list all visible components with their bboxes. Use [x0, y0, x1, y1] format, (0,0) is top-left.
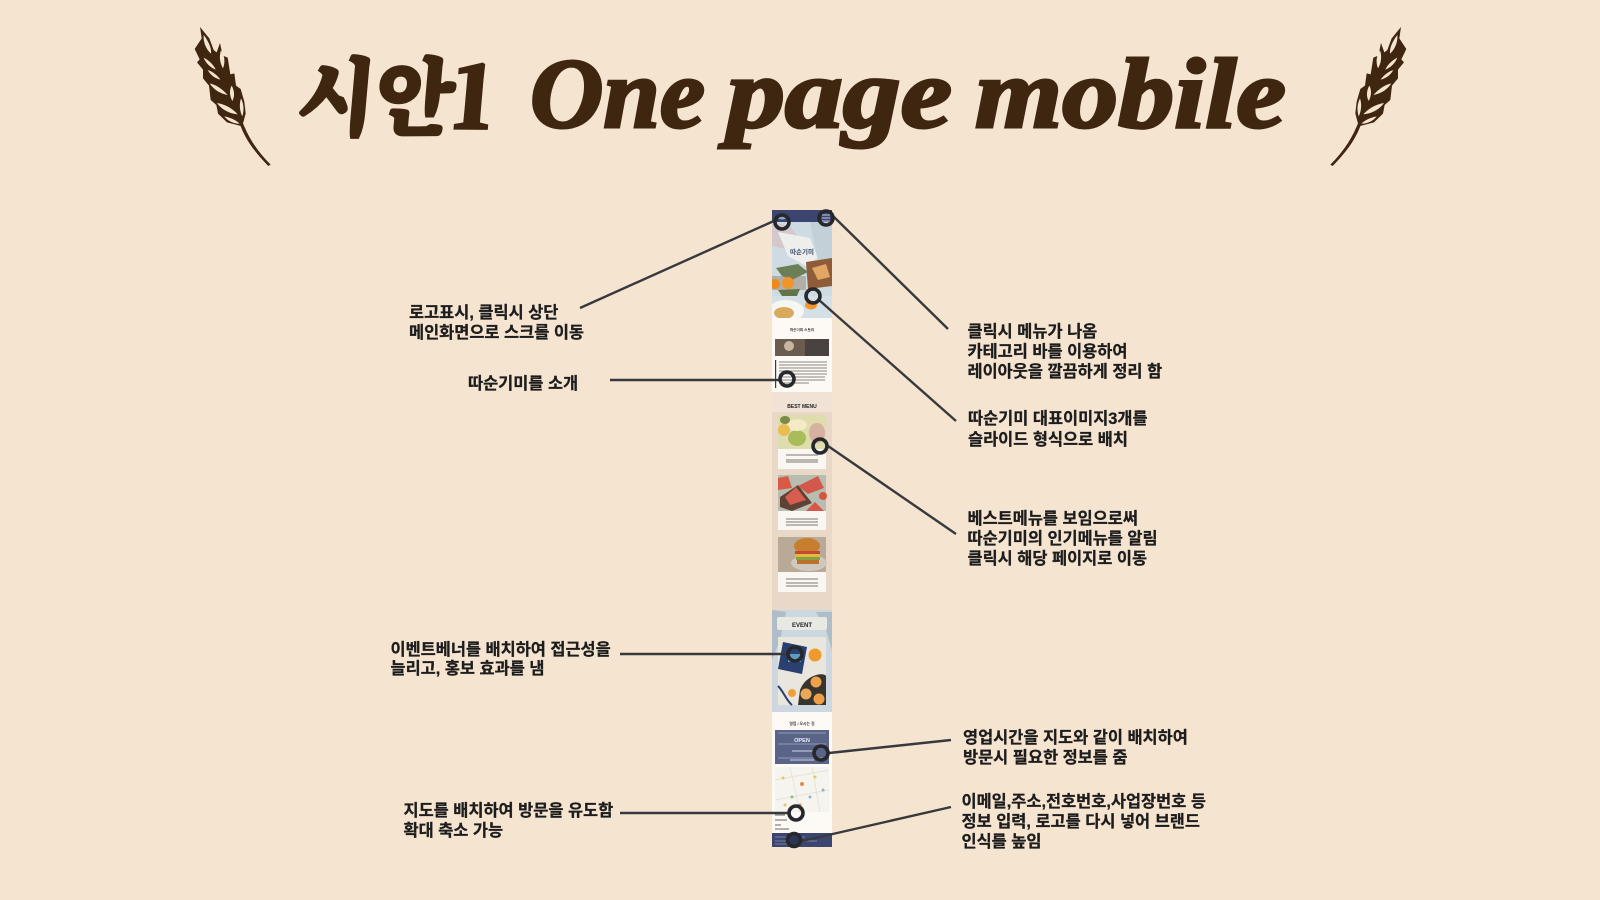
menu card 1 — [778, 415, 826, 469]
label: logo: 메인화면으로 스크롤 이동 — [409, 324, 584, 342]
infographic canvas — [194, 27, 1406, 849]
menu card 3 — [778, 537, 827, 592]
mockup: header bar — [772, 210, 832, 222]
mockup: footer — [772, 833, 832, 847]
callout lines — [580, 216, 956, 841]
highlight circles — [775, 211, 833, 846]
icon: wheat right — [1330, 27, 1406, 166]
label: menu: 클릭시 메뉴가 나옴 — [968, 323, 1097, 341]
mockup: hours and map section: 영업 / 오시는 길 — [789, 721, 815, 726]
label: logo: 로고표시, 클릭시 상단 — [409, 304, 558, 322]
label: event: 늘리고, 홍보 효과를 냄 — [390, 660, 544, 678]
mockup: event banner: EVENT — [792, 623, 812, 629]
title — [293, 32, 1286, 153]
mobile page mockup — [768, 210, 832, 847]
label: best menu: 따순기미의 인기메뉴를 알림 — [968, 529, 1158, 548]
menu card 2 — [778, 475, 827, 530]
mockup: best menu section — [772, 392, 832, 610]
label: slides: 따순기미 대표이미지3개를 — [968, 410, 1148, 428]
label: best menu: 베스트메뉴를 보임으로써 — [968, 510, 1138, 528]
opening hours box: OPEN — [794, 738, 810, 744]
label: slides: 슬라이드 형식으로 배치 — [968, 431, 1128, 449]
title: word page: page — [718, 38, 952, 149]
label: hours: 방문시 필요한 정보를 줌 — [963, 749, 1127, 767]
label: footer: 정보 입력, 로고를 다시 넣어 브랜드 — [962, 813, 1200, 831]
label: menu: 레이아웃을 깔끔하게 정리 함 — [968, 363, 1162, 381]
icon: wheat left — [195, 27, 271, 166]
map — [775, 767, 829, 812]
label: hours: 영업시간을 지도와 같이 배치하여 — [963, 728, 1188, 747]
label: best menu: 클릭시 해당 페이지로 이동 — [968, 550, 1147, 568]
mockup: intro section: 따순기미 스토리 — [790, 327, 814, 332]
title: word mobile: mobile — [975, 38, 1286, 149]
label: map: 지도를 배치하여 방문을 유도함 — [404, 802, 613, 820]
title: word One: One — [530, 38, 705, 149]
mockup: hours and map section — [772, 712, 832, 833]
mockup: best menu section: BEST MENU — [787, 404, 817, 410]
label: map: 확대 축소 가능 — [404, 822, 503, 840]
label: event: 이벤트베너를 배치하여 접근성을 — [390, 641, 611, 659]
mockup: event banner — [772, 610, 832, 712]
label: footer: 이메일,주소,전호번호,사업장번호 등 — [962, 792, 1206, 811]
mockup: hero image — [768, 222, 832, 322]
mockup: hero image: 따순기미 — [790, 247, 814, 256]
title: Korean part: 시안1 — [293, 32, 497, 153]
label: menu: 카테고리 바를 이용하여 — [968, 343, 1127, 361]
label: footer: 인식를 높임 — [962, 833, 1041, 851]
label: intro: 따순기미를 소개 — [468, 375, 578, 393]
mockup: intro section — [772, 318, 832, 392]
